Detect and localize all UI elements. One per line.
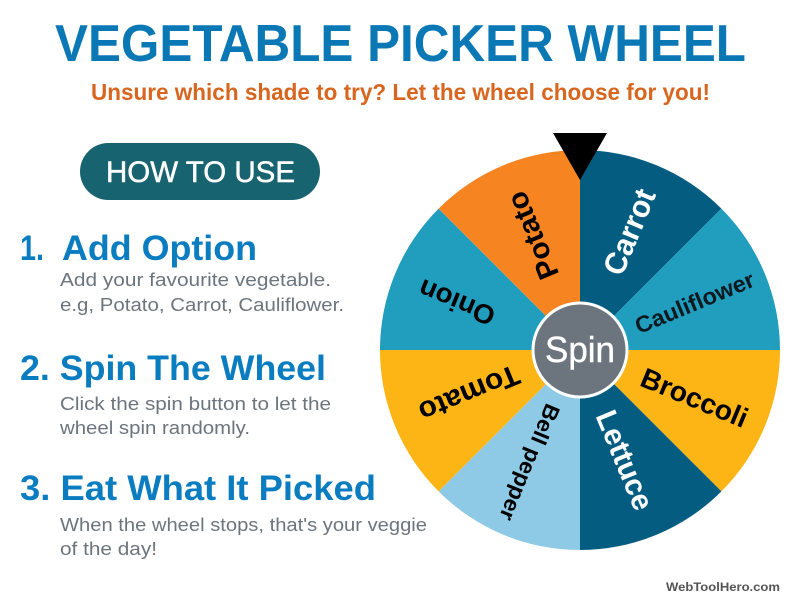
label: Bell pepper: Bell pepper — [494, 400, 565, 525]
step 2: Click the spin button to let the — [60, 394, 331, 414]
how to use pill: HOW TO USE — [106, 156, 295, 189]
label: Carrot: Carrot — [596, 184, 663, 280]
spin button: Spin — [545, 329, 615, 370]
label: Onion: Onion — [414, 273, 500, 331]
step 1: 1. — [20, 229, 44, 268]
step 3: When the wheel stops, that's your veggie — [60, 515, 427, 535]
step 2 — [20, 349, 331, 438]
step 1: Add your favourite vegetable. — [60, 270, 331, 290]
step 1: Add Option — [62, 229, 257, 268]
label: Lettuce: Lettuce — [589, 406, 659, 515]
step 2: 2. Spin The Wheel — [20, 349, 326, 388]
title: VEGETABLE PICKER WHEEL — [55, 15, 746, 73]
step 3: 3. Eat What It Picked — [20, 469, 376, 508]
step 2: wheel spin randomly. — [59, 418, 250, 438]
credit: WebToolHero.com — [666, 580, 780, 594]
wheel — [380, 150, 780, 550]
step 3: of the day! — [60, 539, 157, 559]
subtitle: Unsure which shade to try? Let the wheel choose for you! — [91, 79, 710, 105]
spin button — [533, 303, 627, 397]
step 3 — [20, 469, 427, 559]
label: Tomato: Tomato — [414, 358, 524, 428]
step 1 — [20, 229, 344, 315]
label: Potato: Potato — [501, 186, 566, 284]
label: Cauliflower: Cauliflower — [631, 266, 758, 339]
pointer — [553, 133, 607, 180]
how to use pill — [80, 143, 320, 200]
label: Broccoli: Broccoli — [636, 362, 753, 434]
step 1: e.g, Potato, Carrot, Cauliflower. — [60, 295, 344, 315]
